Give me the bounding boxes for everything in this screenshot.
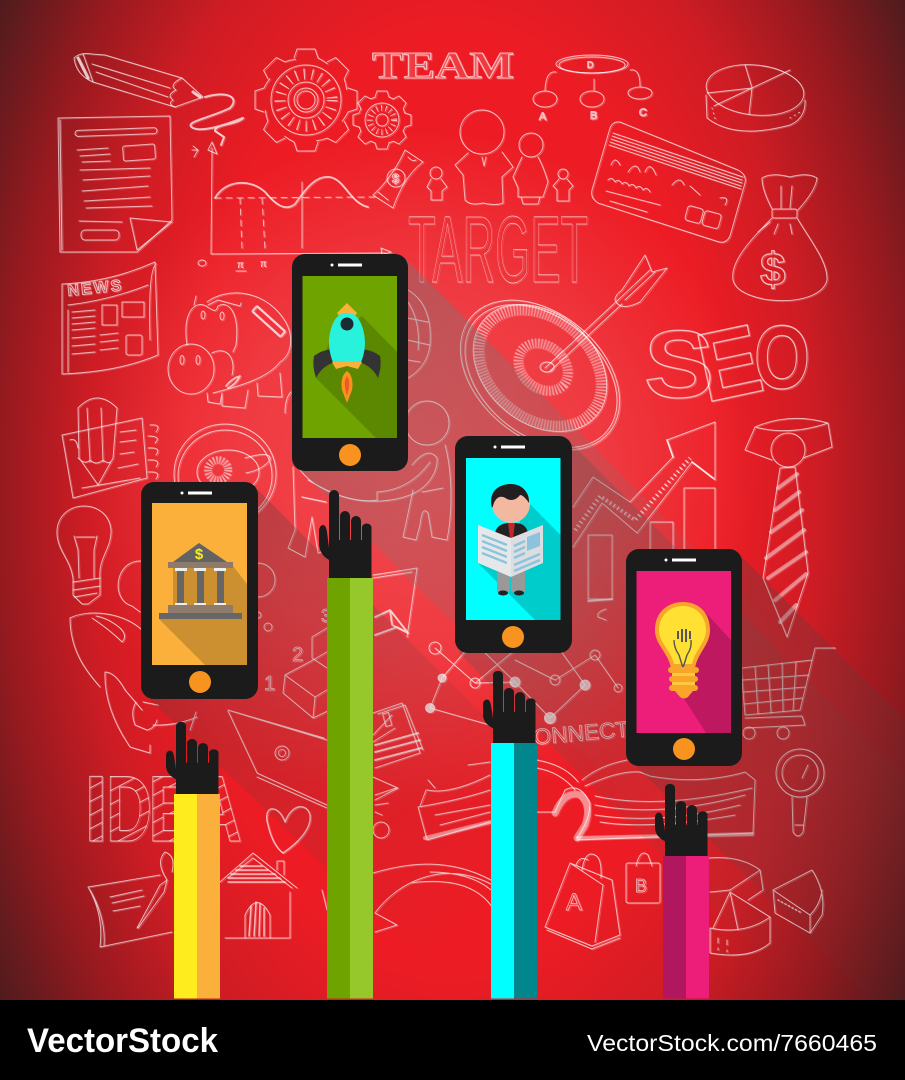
doodle: IDEA word: E	[148, 756, 196, 861]
doodle: CONNECT word: CONNECT	[516, 716, 630, 751]
doodle: pie pieces	[708, 858, 823, 955]
doodle: shopping bag B: B	[635, 876, 647, 896]
doodle: org chart: C	[639, 107, 647, 119]
doodle: TEAM word: TEAM	[372, 45, 514, 87]
doodle: necktie	[745, 418, 832, 637]
doodle: globe behind phone	[408, 290, 430, 378]
doodle: pie chart	[704, 60, 806, 131]
doodle: dollar banknote: $	[392, 171, 400, 186]
doodle: function graph: π	[237, 260, 244, 271]
doodle: heart	[267, 807, 310, 853]
doodle: document page	[58, 116, 172, 252]
doodle: money bag: $	[760, 243, 786, 295]
sketched doodle background	[57, 45, 835, 955]
doodle: coffee cup	[174, 424, 276, 524]
doodle: stepped boxes	[264, 568, 417, 718]
phone: newspaper reader	[455, 436, 572, 653]
doodle: SEO word: O	[754, 308, 810, 408]
doodle: shopping bag B	[626, 853, 660, 903]
doodle: speech bubbles	[118, 561, 275, 631]
doodle: stepped boxes: 3	[321, 606, 331, 626]
arm: cyan	[483, 671, 537, 998]
doodle: function graph: π	[260, 259, 267, 270]
icon: light bulb	[655, 602, 710, 698]
icon: bank building	[159, 543, 242, 619]
doodle: pencil	[74, 54, 203, 107]
icon: man reading newspaper	[478, 484, 543, 596]
doodle: small gear	[353, 91, 411, 149]
doodle: shopping cart	[741, 648, 835, 739]
doodle: light bulb sketch	[57, 506, 111, 604]
doodle: IDEA word: D	[106, 756, 152, 861]
doodle: house	[220, 853, 297, 938]
hand: cyan arm	[483, 671, 536, 743]
arm: pink	[655, 784, 709, 998]
doodle: shopping bag A: A	[566, 889, 582, 916]
arm: yellow	[166, 722, 220, 998]
doodle: money bag	[733, 175, 827, 301]
doodle: function graph	[192, 142, 391, 271]
icon: bank building: $	[195, 546, 204, 563]
doodle: IDEA word	[84, 756, 242, 861]
doodle: SEO word	[644, 303, 810, 423]
phone: light bulb	[626, 549, 742, 766]
doodle: IDEA word: A	[190, 756, 242, 861]
doodle: shopping bag A	[545, 854, 620, 949]
doodle: newspaper	[62, 262, 158, 374]
doodle: envelope and pen	[88, 852, 173, 947]
hand: green arm	[319, 490, 372, 578]
doodle: IDEA word: I	[84, 756, 108, 861]
long phone shadows	[145, 258, 905, 1000]
phone: rocket	[292, 254, 408, 471]
doodle: credit card	[592, 122, 745, 242]
doodle: org chart: A	[539, 111, 547, 123]
doodle: stepped boxes: 2	[292, 644, 303, 666]
doodle: growth arrow and bars	[573, 422, 715, 620]
doodle: large gear	[255, 49, 357, 151]
doodle: people group	[427, 110, 573, 204]
doodle: org chart	[533, 55, 652, 123]
doodle: floppy or book block	[373, 703, 423, 768]
doodle: magnifying glass	[776, 749, 824, 836]
doodle: laptop	[228, 710, 398, 838]
icon: rocket	[313, 303, 381, 403]
doodle: SEO word: S	[644, 311, 714, 418]
doodle: connect network	[426, 640, 622, 725]
hand: pink arm	[655, 784, 708, 856]
footer band	[0, 1000, 905, 1080]
doodle: piggy bank	[168, 293, 291, 408]
doodle: notebook and pencil	[62, 398, 158, 498]
doodle: newspaper: NEWS	[67, 277, 122, 300]
sketch double-line pass	[58, 46, 836, 956]
doodle: SEO word: E	[687, 303, 771, 423]
doodle: squiggle line	[191, 94, 243, 145]
footer image id: VectorStock.com/7660465	[587, 1030, 877, 1056]
doodle: org chart: D	[587, 60, 594, 70]
doodle: org chart: B	[590, 110, 597, 122]
footer logo text: VectorStock	[27, 1022, 218, 1060]
hand: yellow arm	[166, 722, 218, 794]
doodle: archery target	[431, 255, 667, 480]
phone: bank	[141, 482, 258, 699]
doodle: swoosh ribbon	[322, 864, 492, 932]
doodle: figure holding bowl	[285, 392, 451, 557]
doodle: dollar banknote	[373, 150, 423, 208]
doodle: stepped boxes: 1	[264, 673, 275, 695]
sketched doodle background: TARGET	[408, 197, 588, 303]
doodle: open book	[418, 760, 755, 840]
arm: green	[319, 490, 373, 998]
doodle: megaphone	[70, 613, 197, 753]
